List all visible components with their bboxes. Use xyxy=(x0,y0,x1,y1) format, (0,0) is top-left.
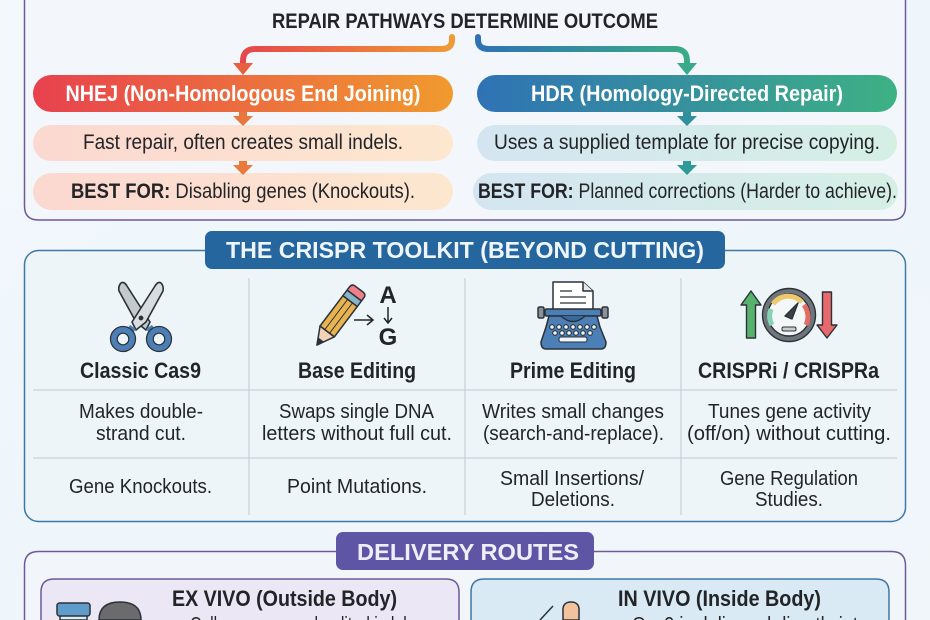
label: CRISPRi / CRISPRa: CRISPRi / CRISPRa xyxy=(698,358,880,383)
HDR best-for pill xyxy=(473,173,898,210)
description: Prime Editing: (search-and-replace). xyxy=(483,422,664,445)
arrow: NHEJ step one xyxy=(233,112,253,126)
arrow: HDR step one xyxy=(677,112,697,126)
description: Base Editing: letters without full cut. xyxy=(262,422,452,445)
NHEJ best-for pill: BEST FOR: Disabling genes (Knockouts). xyxy=(71,180,415,203)
NHEJ header pill: NHEJ (Non-Homologous End Joining) xyxy=(66,81,420,106)
description: Prime Editing xyxy=(482,400,664,445)
label: Prime Editing: Prime Editing xyxy=(510,358,636,383)
description: Base Editing: Swaps single DNA xyxy=(279,400,434,423)
heading: delivery routes xyxy=(336,532,594,570)
description: Prime Editing: Writes small changes xyxy=(482,400,664,423)
icon: gauge with up and down arrows xyxy=(741,288,837,342)
NHEJ best-for pill xyxy=(33,173,453,210)
description: CRISPRi / CRISPRa: Tunes gene activity xyxy=(708,400,872,423)
arrow: to HDR xyxy=(478,37,697,75)
heading: repair pathways determine outcome: REPAIR PATHWAYS DETERMINE OUTCOME xyxy=(272,10,658,33)
label: Base Editing: Base Editing xyxy=(298,358,416,383)
NHEJ description pill xyxy=(33,125,453,161)
use: Classic Cas9: Gene Knockouts. xyxy=(69,475,212,498)
use: Prime Editing: Deletions. xyxy=(531,488,615,511)
use: CRISPRi / CRISPRa: Gene Regulation xyxy=(720,467,858,490)
card: ex vivo xyxy=(41,579,459,620)
panel: repair pathways xyxy=(24,0,906,220)
use: Prime Editing: Small Insertions/ xyxy=(500,467,644,490)
NHEJ header pill xyxy=(33,75,453,112)
panel: CRISPR toolkit xyxy=(24,231,906,522)
use: Prime Editing xyxy=(500,467,644,511)
column: Classic Cas9 xyxy=(69,282,212,498)
arrow: NHEJ step two xyxy=(233,161,253,175)
icon: typewriter xyxy=(538,282,608,349)
panel: delivery routes xyxy=(24,532,906,620)
heading: ex vivo: EX VIVO (Outside Body) xyxy=(172,586,397,611)
arrow: to NHEJ xyxy=(233,37,452,75)
icon: pencil with letter swap xyxy=(310,282,397,351)
icon: pencil with letter swap: A xyxy=(379,282,397,309)
HDR description pill xyxy=(477,125,897,161)
NHEJ column xyxy=(33,75,453,210)
use: CRISPRi / CRISPRa: Studies. xyxy=(755,488,823,511)
icon: vial and head xyxy=(57,602,141,620)
description: Classic Cas9 xyxy=(79,400,203,445)
heading: CRISPR toolkit xyxy=(205,231,725,269)
description: Classic Cas9: strand cut. xyxy=(96,422,186,445)
icon: pencil with letter swap: G xyxy=(379,324,397,351)
arrow: HDR step two xyxy=(677,161,697,175)
description: CRISPRi / CRISPRa: (off/on) without cutting. xyxy=(687,422,891,445)
description: Classic Cas9: Makes double- xyxy=(79,400,203,423)
description: Base Editing xyxy=(262,400,452,445)
heading: in vivo: IN VIVO (Inside Body) xyxy=(618,586,821,611)
use: CRISPRi / CRISPRa xyxy=(720,467,858,511)
label: Classic Cas9: Classic Cas9 xyxy=(80,358,201,383)
HDR header pill: HDR (Homology-Directed Repair) xyxy=(531,81,843,106)
column: Prime Editing xyxy=(482,282,664,511)
column: CRISPRi / CRISPRa xyxy=(687,288,891,511)
NHEJ description pill: Fast repair, often creates small indels. xyxy=(83,131,403,154)
HDR column xyxy=(473,75,898,210)
description: CRISPRi / CRISPRa xyxy=(687,400,891,445)
icon: syringe and person xyxy=(540,602,579,620)
card: in vivo xyxy=(471,579,889,620)
HDR header pill xyxy=(477,75,897,112)
column: Base Editing xyxy=(262,282,452,498)
icon: scissors xyxy=(110,282,172,352)
HDR description pill: Uses a supplied template for precise copying. xyxy=(494,131,880,154)
heading: delivery routes: DELIVERY ROUTES xyxy=(357,539,579,565)
heading: CRISPR toolkit: THE CRISPR TOOLKIT (BEYOND CUTTING) xyxy=(226,237,704,263)
use: Base Editing: Point Mutations. xyxy=(287,475,427,498)
